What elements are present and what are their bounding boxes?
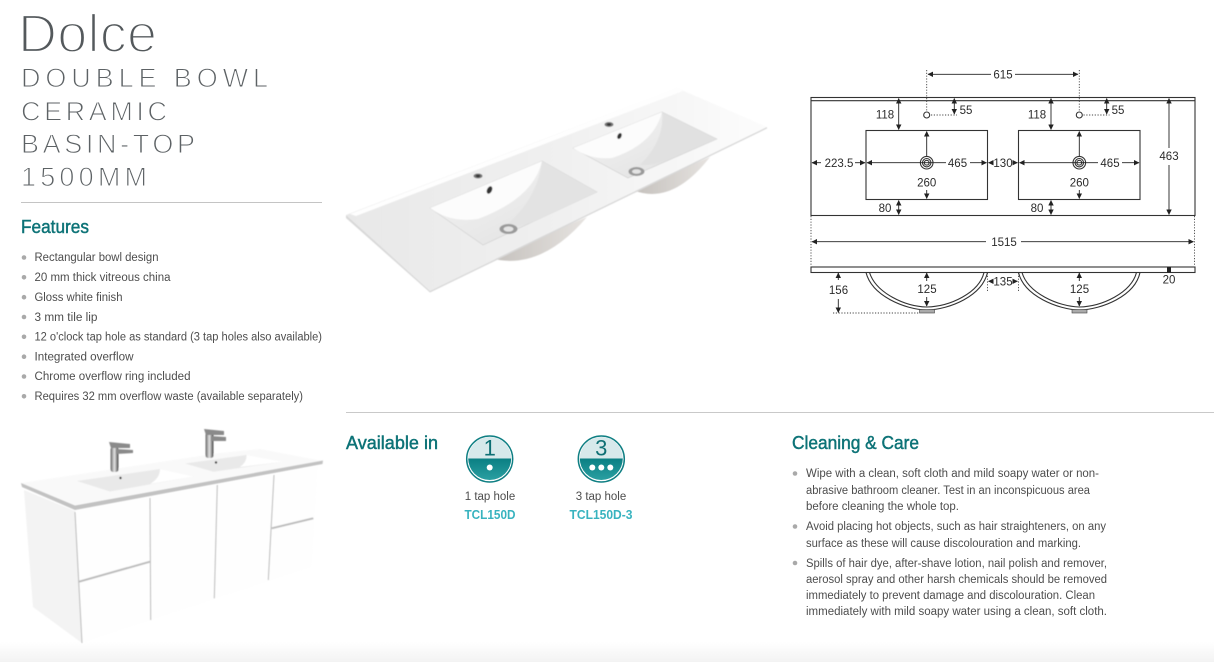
dimension: 135: [988, 276, 1018, 288]
dimension: 463: [1159, 98, 1179, 214]
cleaning instructions: immediately with mild soapy water using a clean, soft cloth.: [806, 606, 1107, 618]
dimension: 55 left: [954, 98, 972, 117]
dimension: 20: 20: [1163, 274, 1175, 286]
dimension: 55 right: 55: [1112, 105, 1124, 117]
icon: 1 tap hole: 1: [484, 436, 496, 460]
dotted extension lines: [811, 70, 1194, 313]
heading: features: Features: [21, 217, 89, 237]
icon: 3 tap hole: 3: [595, 436, 607, 460]
dimension: 118 right: [1028, 98, 1051, 130]
technical dimension drawing: [811, 70, 1195, 313]
title block: [18, 4, 268, 192]
dimension: 80 right: 80: [1031, 203, 1043, 215]
section divider: [346, 412, 1214, 413]
features list: 12 o'clock tap hole as standard (3 tap holes also available): [34, 332, 322, 344]
dimension: 260 left: [917, 132, 936, 198]
title: Dolce: Dolce: [18, 4, 157, 64]
code: TCL150D-3: TCL150D-3: [570, 507, 632, 522]
dimension: 118 left: 118: [876, 110, 894, 122]
cleaning instructions: Wipe with a clean, soft cloth and mild soapy water or non-: [806, 468, 1099, 480]
features list: [22, 252, 322, 403]
dimension: 125 right: 125: [1070, 284, 1089, 296]
cleaning instructions: immediately to prevent damage and discolouration. Clean: [806, 590, 1095, 602]
label: 1 tap hole: 1 tap hole: [465, 491, 515, 503]
label: 3 tap hole: 3 tap hole: [576, 491, 626, 503]
dimension: 135: 135: [993, 276, 1013, 288]
features list: 3 mm tile lip: [34, 312, 98, 324]
features list: Requires 32 mm overflow waste (available separately): [34, 391, 303, 403]
dimension: 223.5: 223.5: [825, 158, 853, 170]
dimension: 125 left: [917, 273, 937, 306]
dimension: 156: 156: [829, 285, 848, 297]
dimension: 118 right: 118: [1028, 110, 1046, 122]
dimension: 465 right: 465: [1100, 158, 1120, 170]
code: TCL150D: TCL150D: [464, 507, 516, 522]
dimension: 465 right: [1020, 158, 1139, 170]
dimension: 55 left: 55: [960, 105, 972, 117]
plan view outline: [811, 98, 1195, 216]
dimension: 463: 463: [1159, 151, 1179, 163]
cleaning instructions: [793, 468, 1107, 618]
dimension: 80 left: 80: [879, 203, 891, 215]
cleaning instructions: Avoid placing hot objects, such as hair straighteners, on any: [806, 521, 1106, 533]
option: 1 tap hole: [464, 436, 516, 522]
bottom background fade: [0, 642, 1214, 662]
cleaning instructions: abrasive bathroom cleaner. Test in an inconspicuous area: [806, 485, 1091, 497]
cleaning instructions: aerosol spray and other harsh chemicals should be removed: [806, 574, 1107, 586]
dimension: 465 left: 465: [948, 158, 967, 170]
heading: available in: Available in: [346, 433, 438, 453]
dimension: 125 right: [1070, 273, 1089, 306]
dimension: 80 right: [1031, 200, 1051, 215]
features list: Gloss white finish: [34, 292, 122, 304]
dimension: 260 right: [1070, 132, 1089, 198]
dimension: 615: 615: [993, 70, 1013, 82]
dimension: 118 left: [876, 98, 899, 130]
dimension: 260 right: 260: [1070, 178, 1089, 190]
product photo: double bowl basin-top: [346, 88, 767, 292]
panel: features: [21, 217, 322, 403]
panel: available in: [346, 433, 632, 522]
subtitle line 3: BASIN-TOP: [21, 129, 195, 159]
dimension: 465 left: [867, 158, 986, 170]
dimension: 55 right: [1107, 98, 1124, 117]
option: 3 tap hole: [570, 436, 632, 522]
dimension: 260 left: 260: [917, 178, 936, 190]
title divider: [21, 202, 322, 203]
dimension: 156: [829, 273, 848, 312]
cleaning instructions: surface as these will cause discolouration and marking.: [806, 538, 1081, 550]
dimension: 223.5: [812, 158, 865, 170]
dimension: 130: 130: [993, 158, 1013, 170]
dimension: 1515: 1515: [991, 237, 1017, 249]
dimension: 80 left: [879, 200, 899, 215]
dimension: 125 left: 125: [917, 284, 937, 296]
cleaning instructions: Spills of hair dye, after-shave lotion, nail polish and remover,: [806, 558, 1107, 570]
features list: Rectangular bowl design: [34, 252, 158, 264]
features list: Chrome overflow ring included: [34, 371, 190, 383]
heading: cleaning and care: Cleaning & Care: [792, 433, 919, 453]
features list: Integrated overflow: [34, 352, 134, 364]
features list: 20 mm thick vitreous china: [34, 272, 171, 284]
cleaning instructions: before cleaning the whole top.: [806, 501, 959, 513]
subtitle line 2: CERAMIC: [21, 96, 167, 126]
subtitle line 4: 1500MM: [21, 162, 147, 192]
side view outline: [811, 267, 1195, 313]
dimension: 130: [988, 158, 1018, 170]
product photo: wall-hung vanity: [21, 429, 323, 643]
subtitle line 1: DOUBLE BOWL: [21, 63, 268, 93]
panel: cleaning and care: [792, 433, 1107, 618]
